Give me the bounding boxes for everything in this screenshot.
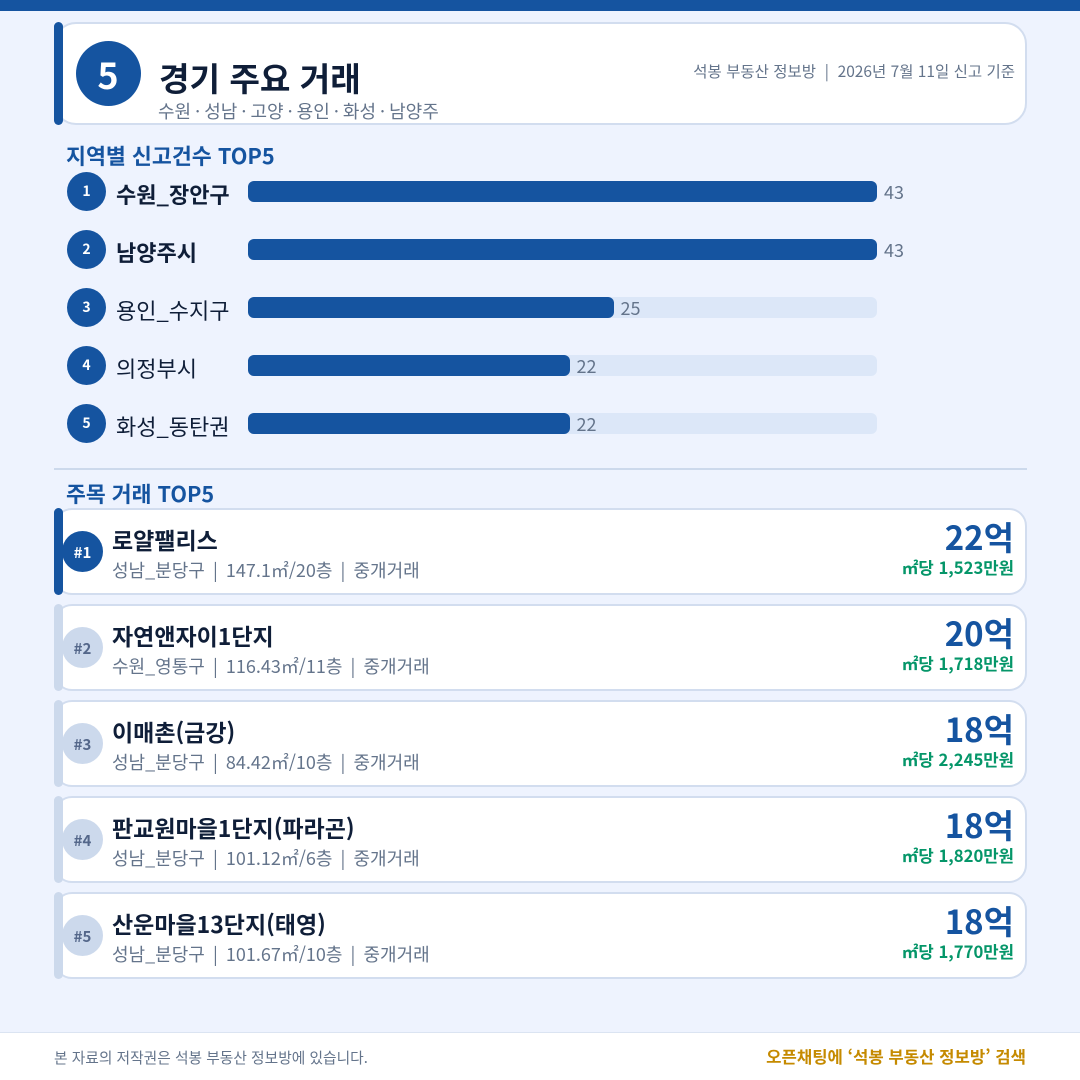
rank badge 5: #5 — [74, 926, 91, 947]
heading: regional top 5: 지역별 신고건수 TOP5 — [66, 140, 275, 171]
unit price 5: ㎡당 1,770만원 — [902, 939, 1014, 963]
unit price 3: ㎡당 2,245만원 — [902, 747, 1014, 771]
details 3: 성남_분당구 | 84.42㎡/10층 | 중개거래 — [112, 749, 420, 775]
value 3: 25 — [620, 295, 640, 321]
rank badge 3: #3 — [74, 734, 91, 755]
header accent bar — [54, 22, 63, 125]
name 4: 판교원마을1단지(파라곤) — [112, 810, 355, 844]
details 2: 수원_영통구 | 116.43㎡/11층 | 중개거래 — [112, 653, 430, 679]
rank 4: 4 — [82, 355, 91, 375]
label 1: 수원_장안구 — [116, 178, 230, 210]
rank badge 1: #1 — [74, 542, 91, 563]
label 5: 화성_동탄권 — [116, 410, 230, 442]
value 4: 22 — [576, 353, 596, 379]
accent 1 — [54, 508, 63, 595]
value 2: 43 — [884, 237, 904, 263]
card 2 — [54, 604, 1027, 691]
details 5: 성남_분당구 | 101.67㎡/10층 | 중개거래 — [112, 941, 430, 967]
name 3: 이매촌(금강) — [112, 714, 235, 748]
rank 4 — [67, 346, 106, 384]
label 3: 용인_수지구 — [116, 294, 230, 326]
price 5: 18억 — [945, 896, 1014, 944]
accent 3 — [54, 700, 63, 787]
name 5: 산운마을13단지(태영) — [112, 906, 326, 940]
rank badge 2 — [62, 627, 103, 668]
panel: deal 4 — [54, 796, 1027, 883]
rank badge 2: #2 — [74, 638, 91, 659]
unit price 2: ㎡당 1,718만원 — [902, 651, 1014, 675]
rank badge 1 — [62, 531, 103, 572]
row 1 — [67, 172, 904, 211]
rank badge 4 — [62, 819, 103, 860]
name 2: 자연앤자이1단지 — [112, 618, 274, 652]
footer — [0, 1032, 1080, 1080]
rank badge 5 — [62, 915, 103, 956]
rank 1 — [67, 172, 106, 210]
panel: header — [54, 22, 1027, 125]
rank badge 4: #4 — [74, 830, 91, 851]
card 5 — [54, 892, 1027, 979]
label 4: 의정부시 — [116, 352, 197, 384]
price 2: 20억 — [945, 608, 1014, 656]
name 1: 로얄팰리스 — [112, 522, 218, 556]
rank 1: 1 — [82, 181, 91, 201]
header card background — [54, 22, 1027, 124]
heading: notable deals top 5: 주목 거래 TOP5 — [66, 478, 214, 509]
row 4 — [67, 346, 877, 385]
rank 5: 5 — [82, 413, 91, 433]
panel: deal 3 — [54, 700, 1027, 787]
subtitle: 수원 · 성남 · 고양 · 용인 · 화성 · 남양주 — [158, 98, 439, 124]
copyright: 본 자료의 저작권은 석봉 부동산 정보방에 있습니다. — [54, 1047, 368, 1068]
price 1: 22억 — [945, 512, 1014, 560]
bar 4 — [248, 355, 877, 376]
accent 4 — [54, 796, 63, 883]
card 4 — [54, 796, 1027, 883]
unit price 4: ㎡당 1,820만원 — [902, 843, 1014, 867]
top band — [0, 0, 1080, 11]
row 2 — [67, 230, 904, 269]
accent 2 — [54, 604, 63, 691]
chart: regional report counts — [67, 172, 904, 443]
details 1: 성남_분당구 | 147.1㎡/20층 | 중개거래 — [112, 557, 420, 583]
card 3 — [54, 700, 1027, 787]
card 1 — [54, 508, 1027, 595]
price 3: 18억 — [945, 704, 1014, 752]
panel: deal 2 — [54, 604, 1027, 691]
open chat note: 오픈채팅에 ‘석봉 부동산 정보방’ 검색 — [766, 1044, 1026, 1068]
bar 2 — [248, 239, 877, 260]
panel: deal 5 — [54, 892, 1027, 979]
region number badge: 5 — [97, 48, 119, 100]
rank badge 3 — [62, 723, 103, 764]
price 4: 18억 — [945, 800, 1014, 848]
bar 1 — [248, 181, 877, 202]
value 5: 22 — [576, 411, 596, 437]
panel: deal 1 — [54, 508, 1027, 595]
rank 3: 3 — [82, 297, 91, 317]
rank 2 — [67, 230, 106, 268]
row 5 — [67, 404, 877, 443]
title: 경기 주요 거래 — [159, 52, 361, 101]
value 1: 43 — [884, 179, 904, 205]
label 2: 남양주시 — [116, 236, 197, 268]
source and date: 석봉 부동산 정보방 | 2026년 7월 11일 신고 기준 — [693, 60, 1015, 82]
region number badge — [76, 41, 141, 106]
bar 5 — [248, 413, 877, 434]
details 4: 성남_분당구 | 101.12㎡/6층 | 중개거래 — [112, 845, 420, 871]
unit price 1: ㎡당 1,523만원 — [902, 555, 1014, 579]
rank 5 — [67, 404, 106, 442]
bar 3 — [248, 297, 877, 318]
accent 5 — [54, 892, 63, 979]
rank 2: 2 — [82, 239, 91, 259]
row 3 — [67, 288, 877, 327]
rank 3 — [67, 288, 106, 326]
